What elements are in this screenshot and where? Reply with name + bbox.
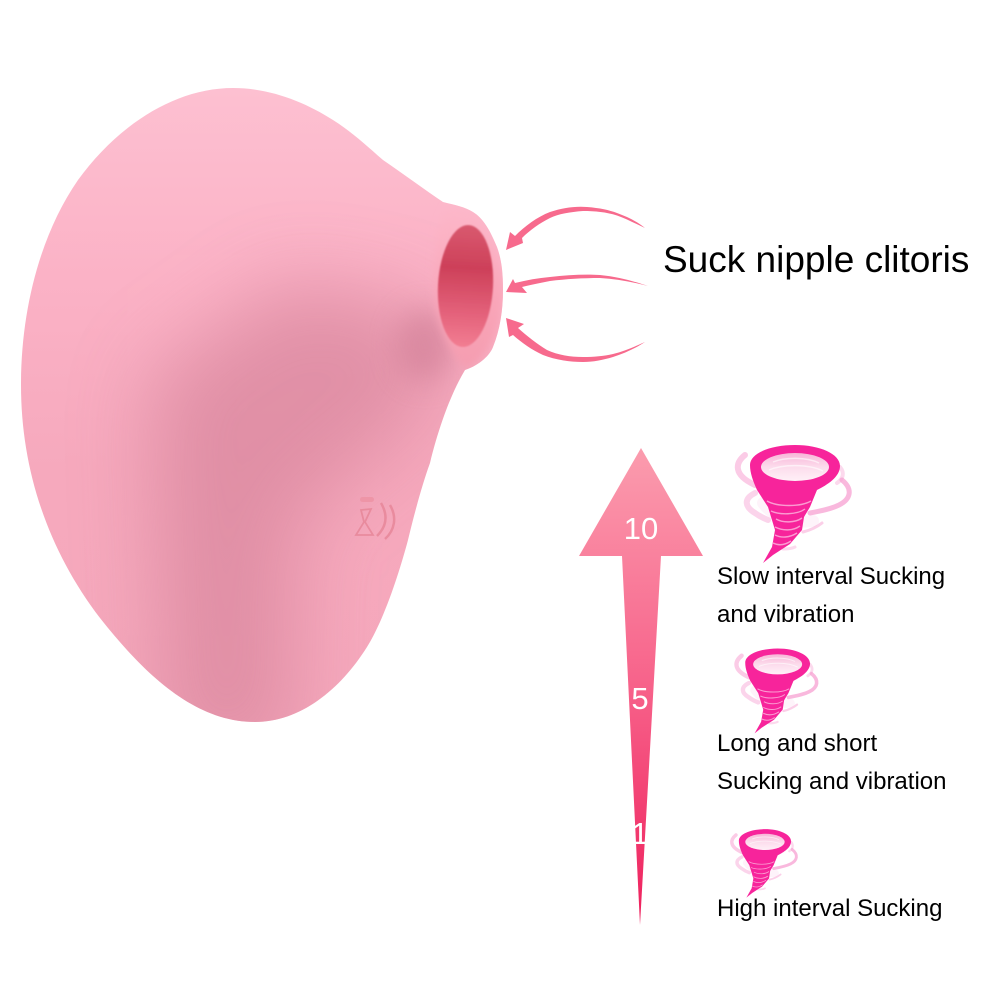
icon: tornado small [732,829,796,898]
intensity arrow [579,448,703,925]
heading: suck nipple clitoris: Suck nipple clitoris [663,239,969,280]
arrow: bottom [506,318,645,362]
text: long and short: Long and short [717,730,877,757]
suction arrows [506,207,648,362]
control button icon [356,497,394,539]
arrow: top [506,207,645,250]
text: slow interval: Slow interval Sucking [717,563,945,590]
text: high interval: High interval Sucking [717,895,942,922]
suction opening [435,224,496,348]
text: slow interval: and vibration [717,601,854,628]
text: long and short: Sucking and vibration [717,768,946,795]
icon: tornado large [738,445,849,563]
arrow: middle [506,275,648,293]
intensity arrow: 5 [631,681,649,716]
icon: tornado medium [736,648,817,733]
text: long and short [717,730,946,795]
text: slow interval [717,563,945,628]
intensity arrow: 1 [631,816,649,851]
intensity arrow: 10 [624,511,658,546]
product body [21,88,503,760]
